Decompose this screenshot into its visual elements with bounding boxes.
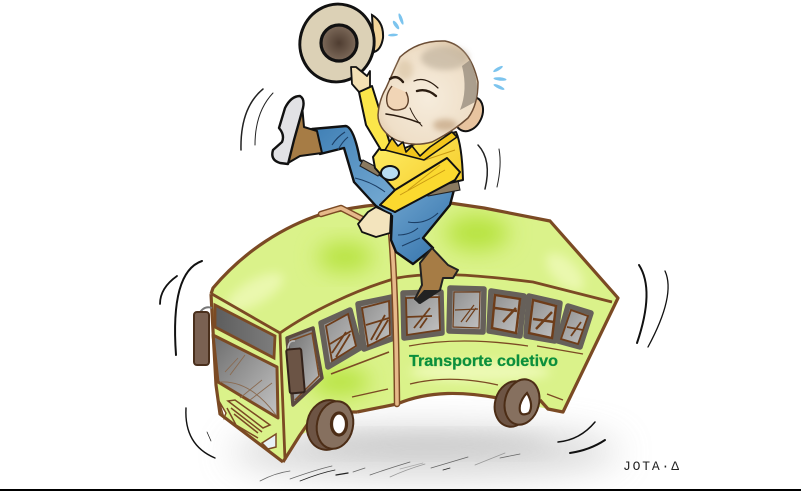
bald head shading (421, 46, 469, 70)
ground motion lines (260, 453, 520, 481)
window 1 with mirror (286, 328, 322, 405)
bus label: Transporte coletivo (409, 353, 558, 370)
side hair (460, 60, 477, 110)
raised hand (351, 67, 370, 92)
rope (321, 208, 397, 404)
motion lines: rear wheel (558, 422, 605, 453)
raised boot (272, 96, 322, 164)
right mirror (288, 341, 295, 350)
lower boot (415, 248, 458, 304)
yellow sleeve: forearm on rope (380, 158, 460, 212)
window frames and reflections (326, 292, 588, 361)
nose (387, 86, 408, 110)
shirt collar (385, 132, 457, 160)
ear (450, 92, 488, 136)
belt buckle (381, 166, 399, 180)
yellow shirt torso (373, 132, 463, 212)
head (378, 41, 488, 144)
face lines (386, 77, 438, 126)
windshield upper panel (215, 305, 275, 358)
bottom border (0, 489, 801, 491)
ground shadow (230, 428, 620, 476)
motion lines: right of bus (637, 265, 668, 347)
left mirror (194, 307, 212, 365)
bus side trim lines (331, 341, 583, 400)
signature: JOTA·Δ (623, 459, 679, 474)
front wheel (302, 396, 358, 454)
jeans: raised leg and seat (312, 126, 455, 264)
shirt fold lines (400, 150, 455, 195)
bus body (211, 202, 618, 462)
windshield (213, 335, 278, 418)
bus front grille and headlights (219, 400, 276, 449)
hat (291, 0, 383, 90)
rear wheel (490, 375, 544, 431)
sweat drops (388, 13, 507, 91)
lower hand (358, 207, 391, 237)
side windows (321, 288, 591, 367)
motion lines: torso (478, 145, 500, 189)
yellow sleeve: raised arm (359, 86, 392, 150)
belt and jeans folds (332, 132, 460, 246)
roof edge and corner lines (212, 275, 612, 460)
motion lines: raised boot (241, 89, 273, 150)
head shape (378, 41, 478, 144)
motion lines: left of bus (160, 261, 215, 458)
